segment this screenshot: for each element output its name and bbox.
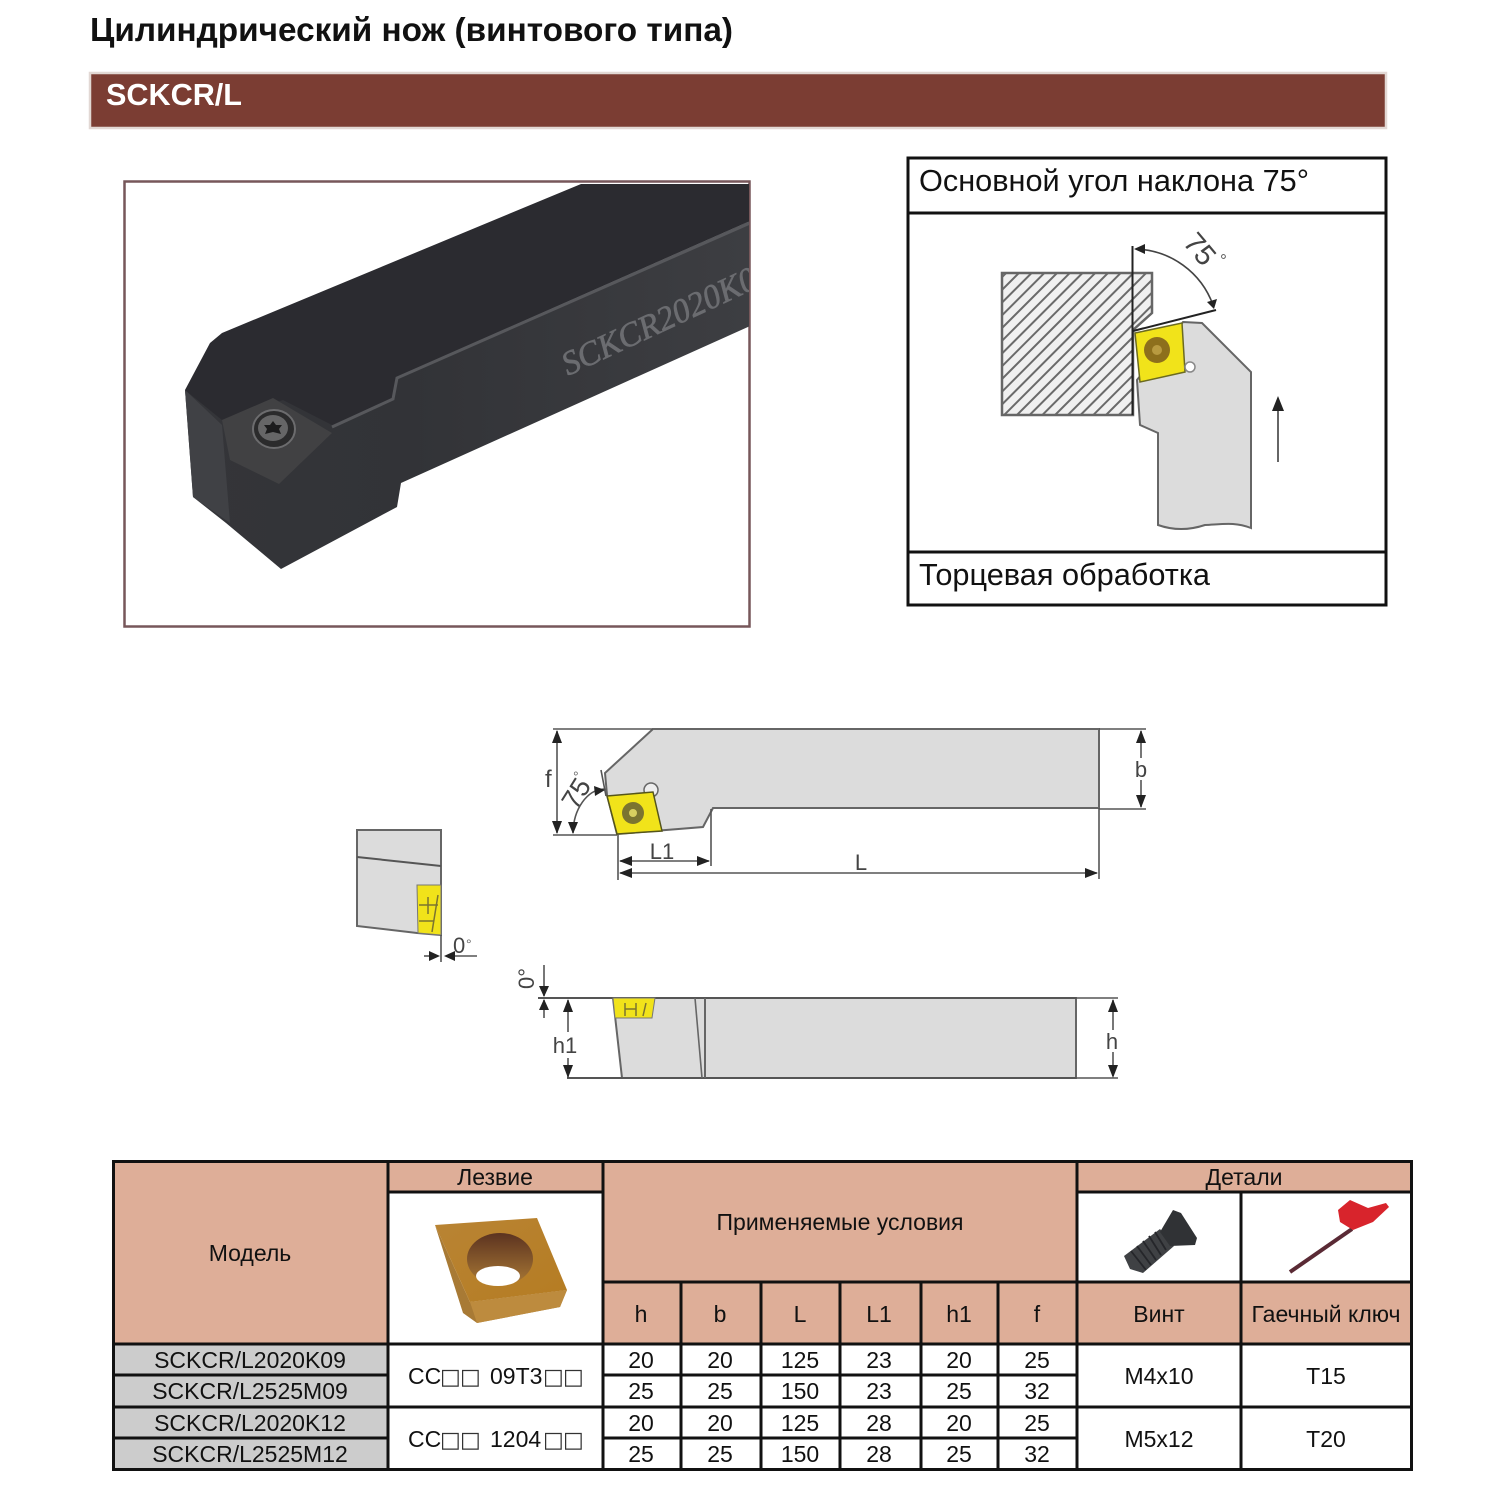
- table data: 25: [1024, 1347, 1050, 1373]
- insert code row 1: CC: [408, 1363, 441, 1389]
- dimension 0 degrees: [514, 965, 549, 1018]
- table data: 25: [946, 1441, 972, 1467]
- table data: 23: [866, 1378, 892, 1404]
- table headers: h1: [946, 1301, 972, 1327]
- insert code row 1: □: [440, 1365, 461, 1390]
- insert code row 2: 1204: [490, 1426, 541, 1452]
- table data: 20: [628, 1347, 654, 1373]
- insert code row 2: □: [440, 1428, 461, 1453]
- dimension L: [619, 808, 1099, 879]
- dimension 0 degrees: 0: [453, 933, 465, 958]
- icon: screw: [1124, 1210, 1197, 1273]
- dimension 75 degrees: [556, 768, 606, 834]
- table data: M5x12: [1124, 1426, 1194, 1452]
- dimension L1: [618, 809, 711, 880]
- insert seat: [222, 398, 332, 484]
- technical drawing: front view: [514, 965, 1123, 1078]
- tool side face: [185, 221, 750, 569]
- table headers: Винт: [1133, 1301, 1185, 1327]
- highlight edge: [332, 223, 750, 427]
- table headers: Применяемые условия: [717, 1209, 963, 1235]
- table data: 32: [1024, 1378, 1050, 1404]
- insert code row 1: □: [563, 1365, 584, 1390]
- table headers: L1: [866, 1301, 892, 1327]
- torx screw: [253, 410, 295, 448]
- table data: SCKCR/L2525M12: [152, 1441, 348, 1467]
- table data: T15: [1306, 1363, 1346, 1389]
- panel: product photo: [124, 182, 778, 626]
- tool top face: [185, 184, 750, 425]
- table data: 20: [628, 1410, 654, 1436]
- insert: [613, 998, 655, 1018]
- dimension b: [1099, 729, 1151, 809]
- insert: [417, 885, 441, 935]
- panel caption: Торцевая обработка: [919, 557, 1211, 592]
- table headers: h: [635, 1301, 647, 1327]
- table headers: [209, 1164, 1400, 1327]
- insert code row 1: 09T3: [490, 1363, 542, 1389]
- panel heading: Основной угол наклона 75°: [919, 163, 1309, 198]
- table data: SCKCR/L2020K09: [154, 1347, 346, 1373]
- technical drawing: end view: [357, 830, 477, 962]
- dimension h1: [553, 999, 577, 1078]
- dimension L1: L1: [650, 839, 674, 864]
- insert code row 2: □: [460, 1428, 481, 1453]
- insert code row 1: □: [543, 1365, 564, 1390]
- icon: wrench: [1290, 1200, 1389, 1272]
- table data: SCKCR/L2020K12: [154, 1410, 346, 1436]
- banner: SCKCR/L: SCKCR/L: [106, 77, 242, 112]
- table data: 20: [946, 1347, 972, 1373]
- panel: cutting angle: [908, 158, 1386, 605]
- dimension h: h: [1106, 1029, 1118, 1054]
- table data: 125: [781, 1410, 819, 1436]
- table data: M4x10: [1124, 1363, 1194, 1389]
- dimension 75 degrees: °: [570, 768, 587, 782]
- dimension 75 degrees: 75: [556, 773, 597, 814]
- table data: 150: [781, 1378, 819, 1404]
- tool holder: [1137, 322, 1251, 529]
- engraved model text: SCKCR2020K09: [556, 253, 778, 383]
- angle dimension 75: 75: [1177, 227, 1222, 272]
- table data: 28: [866, 1410, 892, 1436]
- table data: 25: [707, 1441, 733, 1467]
- insert code row 2: CC: [408, 1426, 441, 1452]
- feed arrow: [1272, 396, 1284, 462]
- table data: 25: [707, 1378, 733, 1404]
- table data: 25: [1024, 1410, 1050, 1436]
- table grid: [113, 1161, 1412, 1470]
- dimension 0 degrees: 0°: [514, 968, 539, 989]
- table headers: b: [714, 1301, 726, 1327]
- dimension f: [545, 730, 562, 834]
- table headers: f: [1034, 1301, 1041, 1327]
- table headers: Лезвие: [457, 1164, 533, 1190]
- left facet: [185, 390, 230, 523]
- icon: insert: [435, 1218, 567, 1323]
- table data: 28: [866, 1441, 892, 1467]
- table data: 125: [781, 1347, 819, 1373]
- table headers: Детали: [1206, 1164, 1282, 1190]
- dimension h: [1076, 998, 1123, 1078]
- table data: 150: [781, 1441, 819, 1467]
- workpiece: [1002, 273, 1152, 415]
- specification table: [113, 1161, 1412, 1470]
- banner: SCKCR/L: [90, 73, 1386, 128]
- dimension 0 degrees: °: [466, 936, 472, 952]
- title: Цилиндрический нож (винтового типа): [90, 11, 733, 48]
- table data: 25: [628, 1441, 654, 1467]
- table backgrounds: [113, 1161, 1412, 1470]
- dimension h1: h1: [553, 1033, 577, 1058]
- insert code row 1: □: [460, 1365, 481, 1390]
- technical drawing: top view: [545, 729, 1151, 880]
- table data: 20: [946, 1410, 972, 1436]
- insert: [607, 783, 662, 834]
- dimension f: f: [545, 766, 552, 793]
- insert code row 2: □: [563, 1428, 584, 1453]
- insert code row 2: □: [543, 1428, 564, 1453]
- table headers: Модель: [209, 1240, 291, 1266]
- angle dimension 75: [1132, 227, 1230, 415]
- table data: 20: [707, 1347, 733, 1373]
- dimension L: L: [855, 850, 867, 875]
- table data: 25: [946, 1378, 972, 1404]
- table data: [152, 1347, 1346, 1467]
- angle dimension 75: °: [1211, 250, 1230, 268]
- table data: T20: [1306, 1426, 1346, 1452]
- table data: SCKCR/L2525M09: [152, 1378, 348, 1404]
- table data: 25: [628, 1378, 654, 1404]
- dimension 0 degrees: [424, 933, 477, 962]
- table data: 20: [707, 1410, 733, 1436]
- dimension b: b: [1135, 757, 1147, 782]
- insert: [1135, 323, 1195, 382]
- table headers: L: [794, 1301, 807, 1327]
- table headers: Гаечный ключ: [1252, 1301, 1400, 1327]
- table data: 23: [866, 1347, 892, 1373]
- table data: 32: [1024, 1441, 1050, 1467]
